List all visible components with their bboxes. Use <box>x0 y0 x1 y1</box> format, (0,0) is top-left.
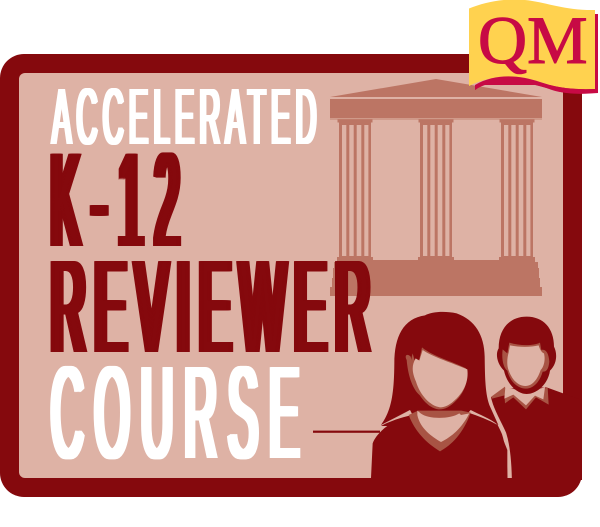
icon: female figure <box>371 312 507 478</box>
light halo around female figure <box>487 383 510 478</box>
title: K-12: K-12 <box>51 126 191 274</box>
title: Reviewer: REVIEWER <box>50 233 379 380</box>
logo: QM flag: QM <box>478 2 588 78</box>
icon: male figure <box>491 317 582 480</box>
title: Accelerated: ACCELERATED <box>52 72 322 161</box>
title: Course: COURSE <box>51 339 310 486</box>
